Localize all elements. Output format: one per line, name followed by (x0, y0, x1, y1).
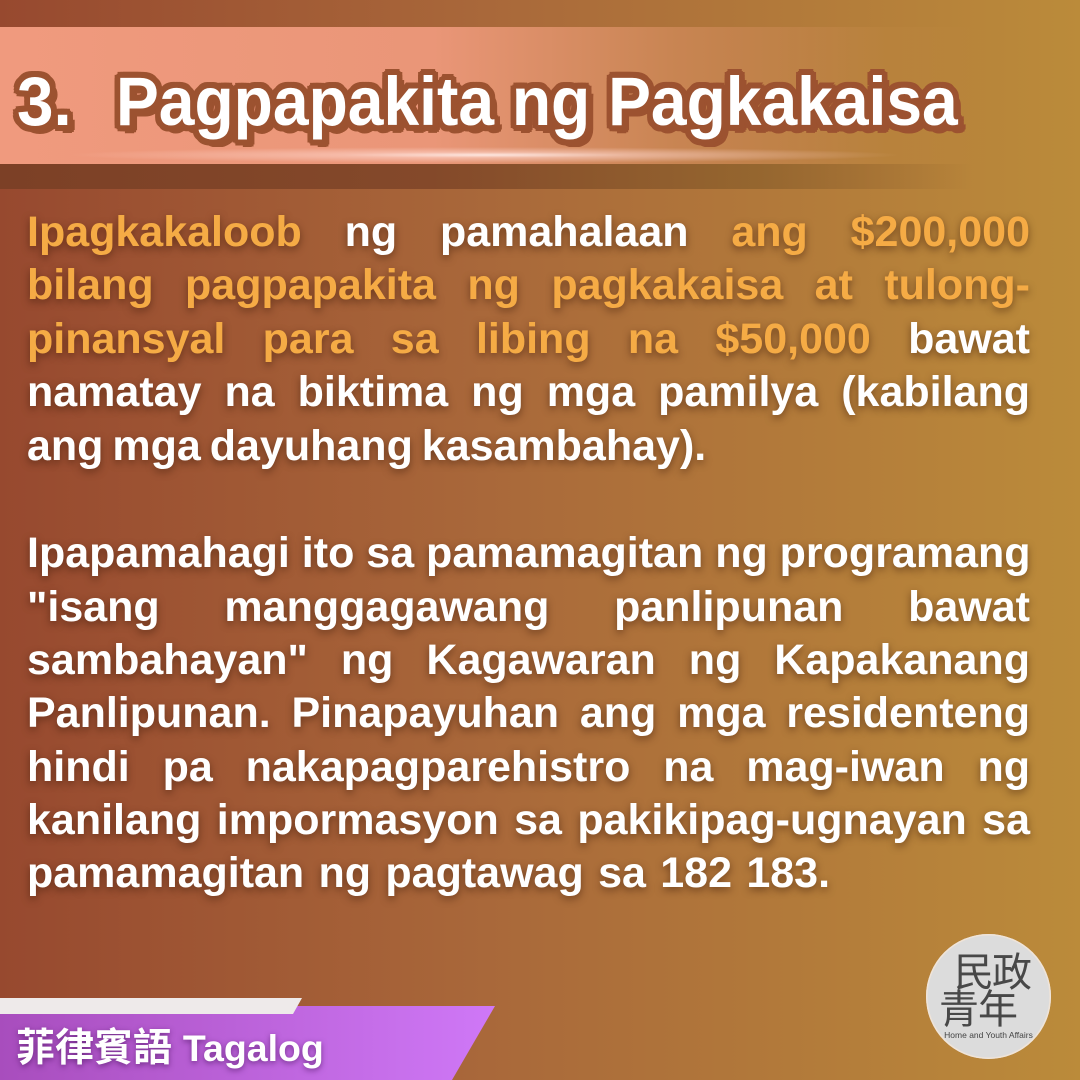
paragraph: distribution and registration (26, 529, 1033, 903)
paragraph: financial assistance: pinansyal para sa libing na $50,000 bawat (27, 315, 1030, 363)
paragraph: distribution and registration: Panlipunan. Pinapayuhan ang mga residenteng (27, 689, 1030, 737)
paragraph: distribution and registration: hindi pa nakapagparehistro na mag-iwan ng (27, 743, 1030, 791)
logo: Home and Youth Affairs: Home and Youth Affairs (944, 1030, 1033, 1040)
paragraph: financial assistance (25, 208, 1032, 476)
title: 3. (17, 63, 72, 140)
logo: Home and Youth Affairs: 政 (992, 940, 1032, 998)
language tag banner (0, 998, 495, 1080)
paragraph: distribution and registration: Ipapamahagi ito sa pamamagitan ng programang (27, 529, 1031, 577)
paragraph: financial assistance: bilang pagpapakita ng pagkakaisa at tulong- (27, 261, 1030, 309)
logo: Home and Youth Affairs: 年 (978, 977, 1018, 1035)
paragraph: distribution and registration: pamamagitan ng pagtawag sa 182 183. (27, 849, 830, 897)
title: Pagpapakita ng Pagkakaisa (116, 63, 958, 140)
paragraph: distribution and registration: sambahayan" ng Kagawaran ng Kapakanang (27, 636, 1030, 684)
paragraph: financial assistance: namatay na biktima ng mga pamilya (kabilang (27, 368, 1030, 416)
paragraph: financial assistance: Ipagkakaloob ng pamahalaan ang $200,000 (27, 208, 1030, 256)
paragraph: distribution and registration: "isang manggagawang panlipunan bawat (27, 583, 1030, 631)
language label: 菲律賓語 Tagalog (16, 1027, 324, 1070)
paragraph: distribution and registration: kanilang impormasyon sa pakikipag-ugnayan sa (27, 796, 1030, 844)
logo: Home and Youth Affairs (926, 934, 1051, 1059)
purple ribbon (0, 998, 495, 1080)
logo: Home and Youth Affairs: 民 (954, 940, 994, 998)
title banner (0, 27, 920, 189)
paragraph: financial assistance: ang mga dayuhang kasambahay). (27, 422, 706, 470)
logo: Home and Youth Affairs: 青 (939, 977, 979, 1035)
